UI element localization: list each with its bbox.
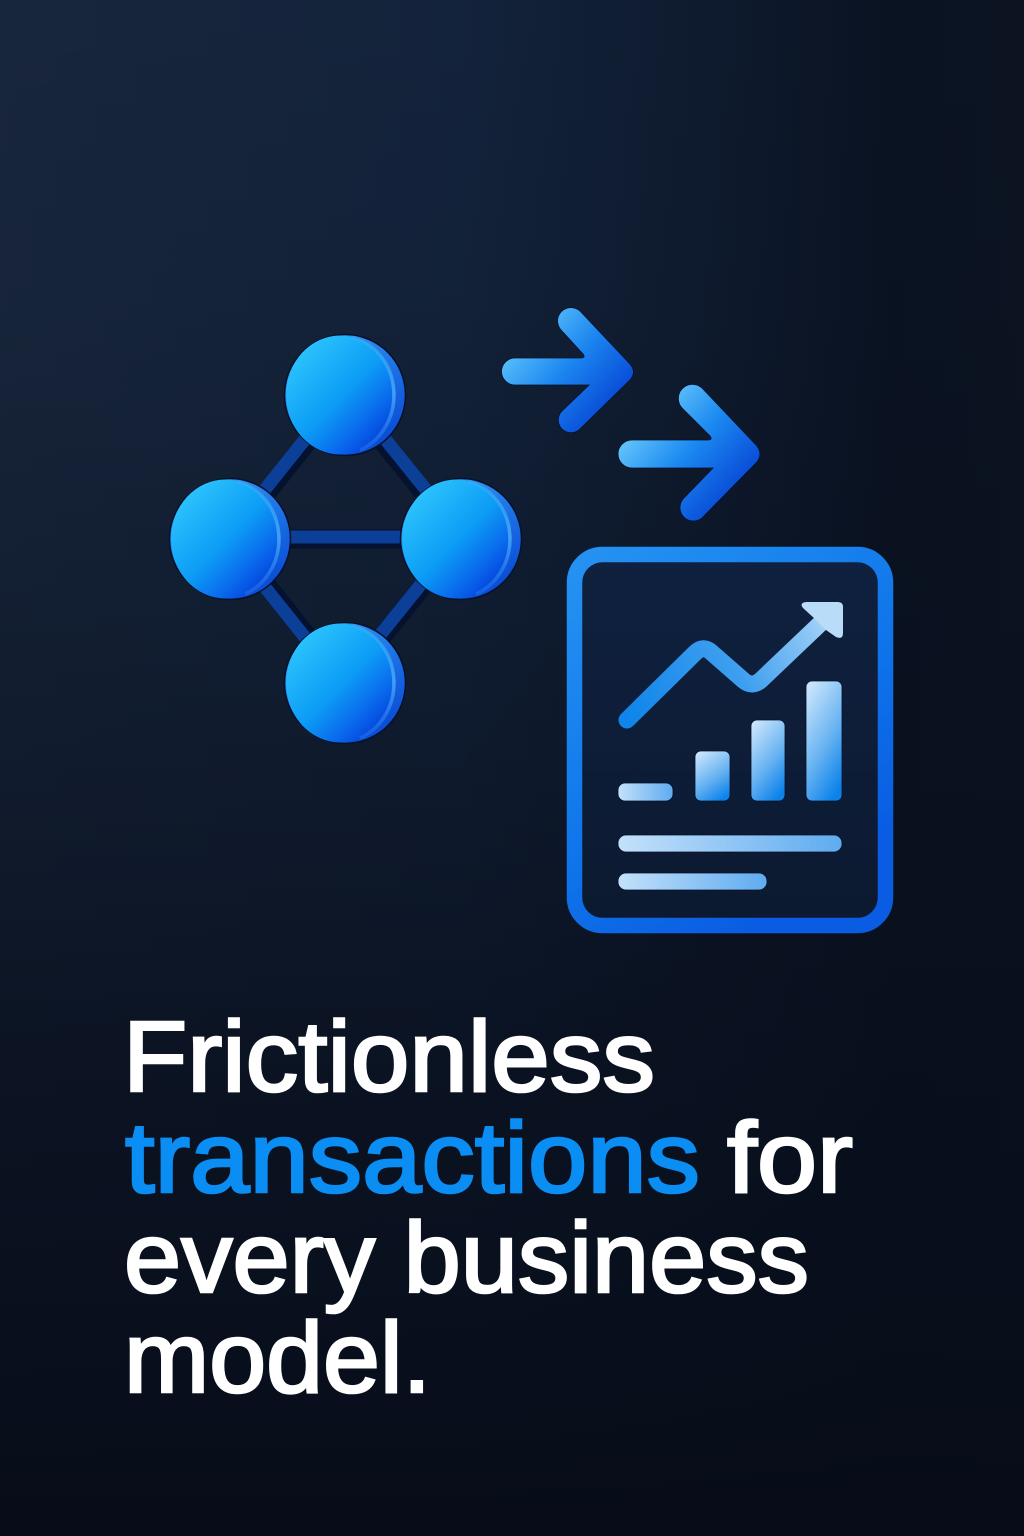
node: bottom: [284, 622, 406, 744]
network connector lines: [227, 393, 464, 685]
title: [123, 1001, 853, 1414]
node: top: [284, 334, 406, 456]
icon: lower arrow: [618, 384, 760, 521]
node: left: [170, 478, 290, 600]
panel: report card: [574, 554, 886, 926]
card frame: [574, 554, 886, 926]
node: right: [400, 478, 522, 600]
icon: upper arrow: [502, 308, 634, 433]
title line 2: for: for: [727, 1102, 853, 1214]
title line 1: Frictionless: [123, 1001, 655, 1113]
line chart with trend arrow: [627, 602, 843, 720]
title line 3: every business: [124, 1202, 809, 1314]
title line 4: model.: [124, 1302, 431, 1414]
title line 2: highlighted word: transactions: [125, 1102, 700, 1214]
text lines: [618, 835, 842, 890]
bar chart: [618, 681, 842, 801]
icon: network of four nodes: [170, 334, 522, 744]
